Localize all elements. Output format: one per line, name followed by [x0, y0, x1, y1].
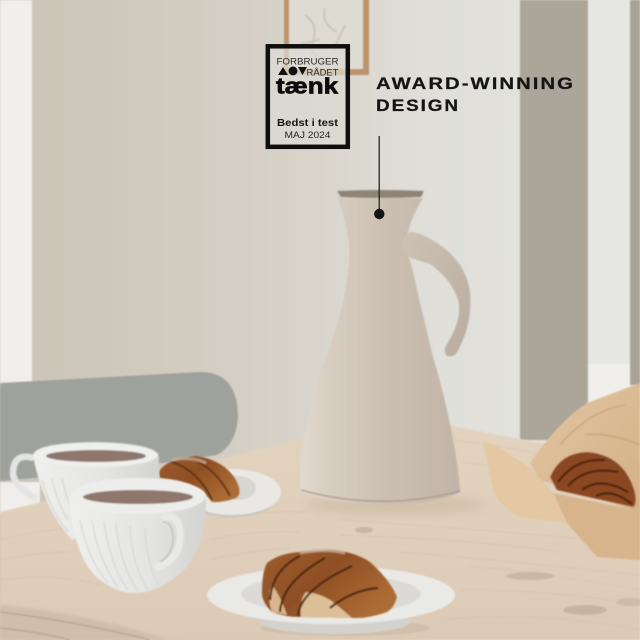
- window at left: [0, 0, 32, 386]
- jug: [300, 190, 470, 505]
- badge: best in test: Bedst i test: [277, 117, 339, 129]
- front plate: [207, 566, 455, 636]
- award badge: [268, 46, 348, 147]
- heading: award-winning design: [376, 74, 575, 115]
- badge: organisation name second line: RÅDET: [306, 68, 339, 78]
- back cup: [13, 442, 159, 540]
- jug lid: [337, 190, 424, 198]
- jug handle: [402, 232, 470, 356]
- callout leader line: [374, 136, 384, 219]
- cup handle: [158, 517, 180, 567]
- back plate: [183, 469, 281, 517]
- heading: award-winning design: AWARD-WINNING: [376, 74, 575, 93]
- back cinnamon bun: [159, 456, 240, 502]
- heading: award-winning design: DESIGN: [376, 96, 460, 115]
- jug body: [300, 198, 460, 505]
- front cinnamon bun: [262, 550, 397, 618]
- badge: taenk wordmark: tænk: [276, 74, 339, 98]
- wall picture frame: [284, 0, 369, 75]
- table top: [0, 420, 640, 640]
- badge: shape icons: [278, 66, 307, 75]
- front cup: [69, 478, 206, 593]
- paper bag with pastry: [483, 383, 640, 560]
- jug shadow on table: [305, 495, 485, 515]
- dining chair back: [0, 372, 238, 481]
- badge: date: MAJ 2024: [284, 130, 330, 141]
- striped window frames at right: [520, 0, 640, 440]
- badge: organisation name: FORBRUGER: [276, 56, 339, 68]
